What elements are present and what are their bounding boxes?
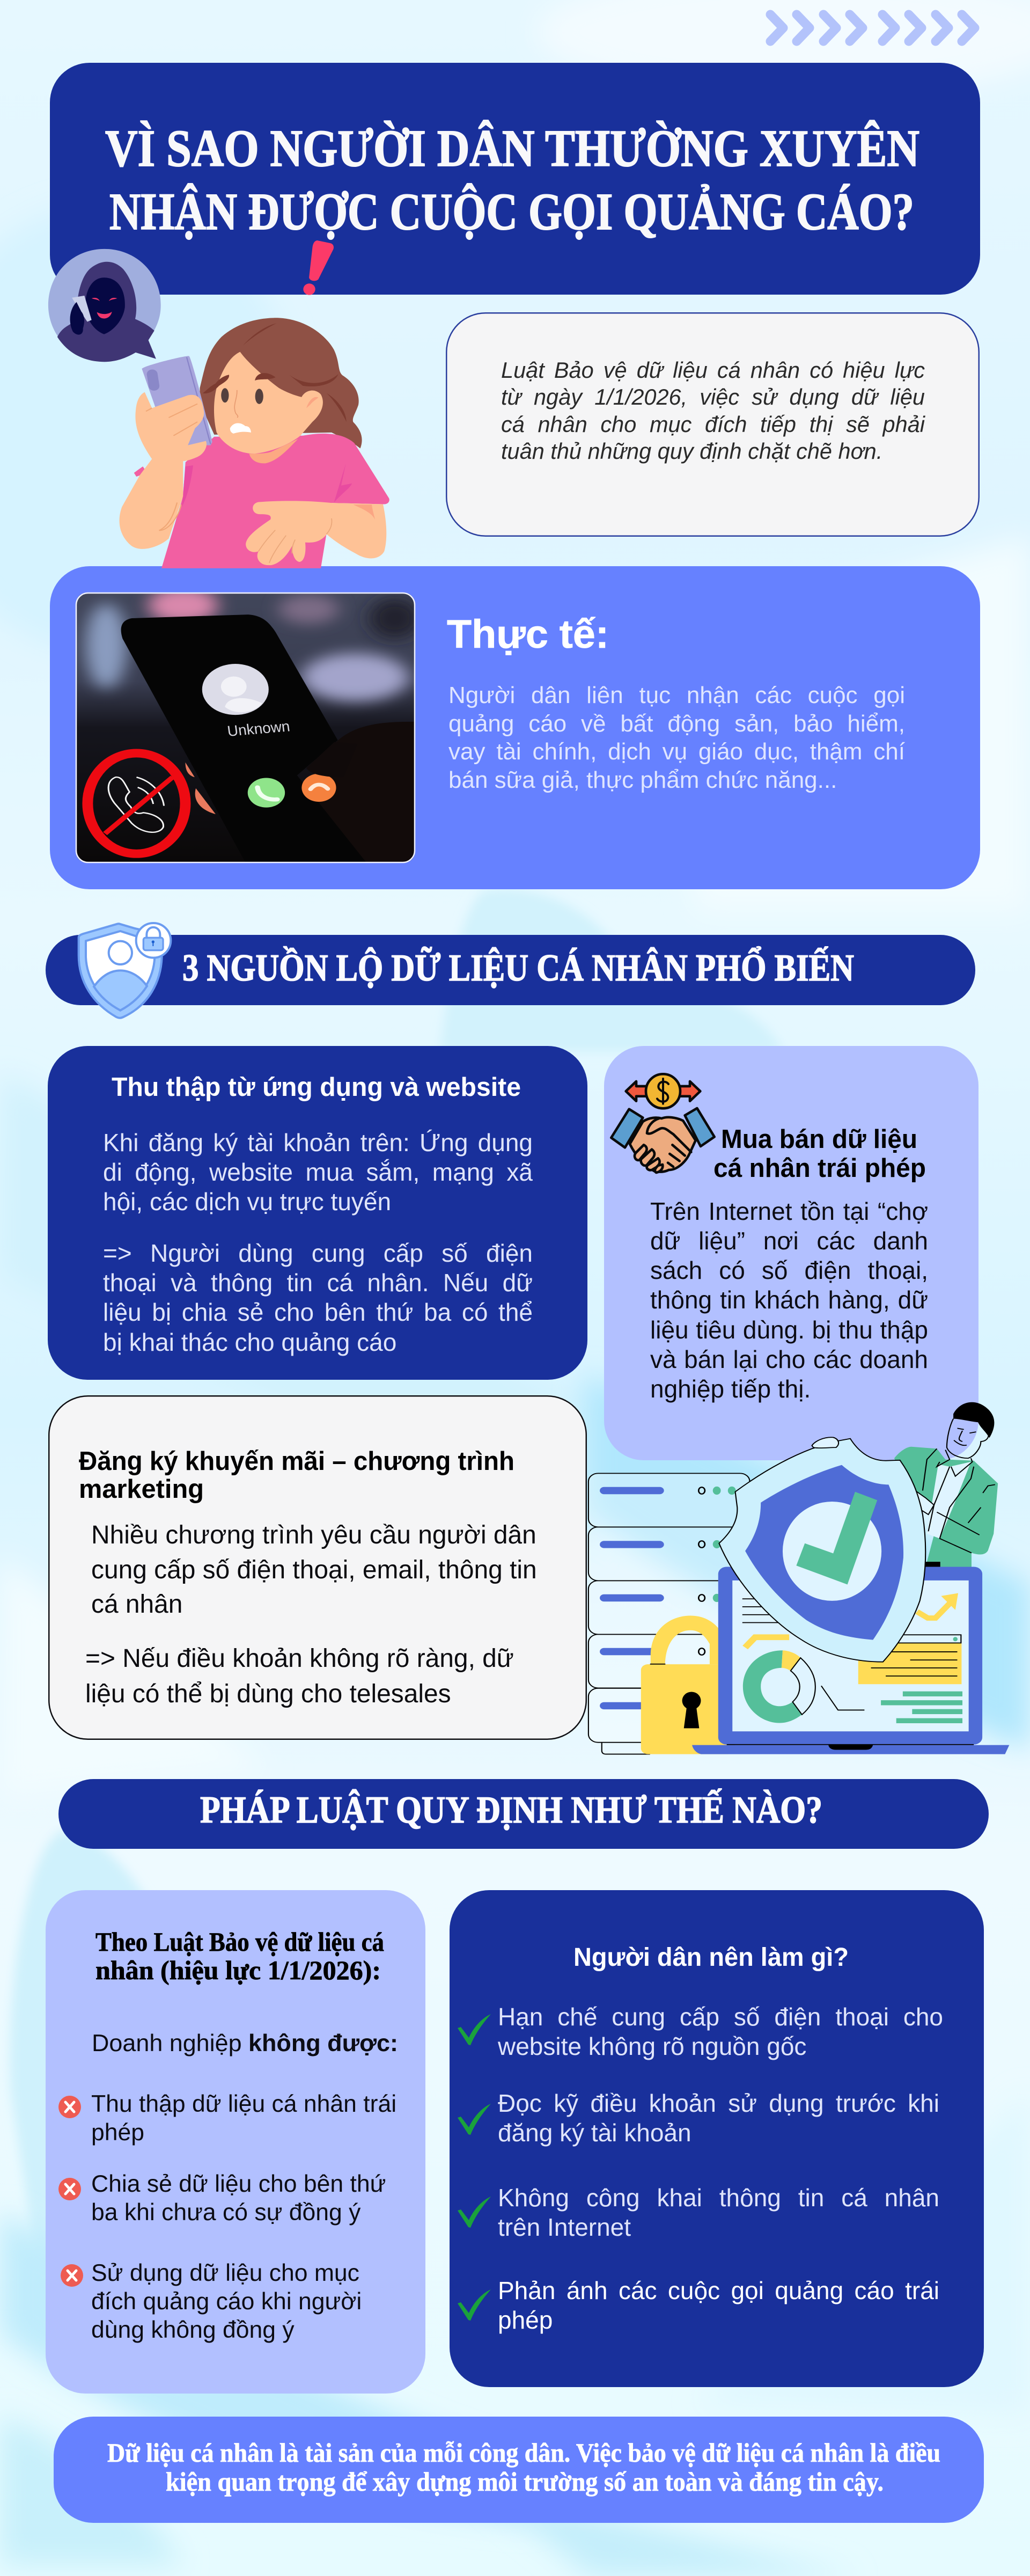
padlock (641, 1616, 734, 1754)
panel text: liệu tiêu dùng. bị thu thập (650, 1316, 928, 1344)
illustration: data security with shield, servers, lock, laptop and businessman (585, 1390, 1030, 1766)
paragraph 1: cá nhân (91, 1590, 182, 1619)
panel heading: Người dân nên làm gì? (573, 1943, 849, 1972)
intro text: cá nhân cho mục đích tiếp thị sẽ phải (501, 412, 925, 437)
advice 4: Phản ánh các cuộc gọi quảng cáo trái (498, 2277, 939, 2304)
paragraph 2: => Người dùng cung cấp số điện (103, 1239, 533, 1267)
panel heading line 2: nhân (hiệu lực 1/1/2026): (95, 1955, 381, 1985)
businessman (894, 1402, 998, 1567)
paragraph 2: thoại và thông tin cá nhân. Nếu dữ (103, 1269, 533, 1297)
advice 2 (498, 2089, 939, 2148)
advice 4: phép (498, 2306, 553, 2334)
photo: phone with unknown caller (75, 592, 415, 863)
advice 3: Không công khai thông tin cá nhân (498, 2184, 939, 2212)
paragraph 1: Nhiều chương trình yêu cầu người dân (91, 1521, 536, 1549)
exclamation mark (303, 240, 334, 295)
prohibited item 3 (91, 2259, 362, 2344)
icon: cross 3 (60, 2264, 83, 2287)
panel: collected from apps and websites (48, 1046, 587, 1380)
paragraph 2 (103, 1239, 533, 1357)
section header text: PHÁP LUẬT QUY ĐỊNH NHƯ THẾ NÀO? (200, 1788, 822, 1831)
section header: 3 sources (45, 935, 975, 1005)
paragraph 2: => Nếu điều khoản không rõ ràng, dữ (85, 1644, 514, 1673)
footer panel (54, 2417, 984, 2523)
footer line 2: kiện quan trọng để xây dựng môi trường số an toàn và đáng tin cậy. (166, 2467, 884, 2497)
reality text: Người dân liên tục nhận các cuộc gọi (448, 682, 905, 708)
reality text: vay tài chính, dịch vụ giáo dục, thậm chí (448, 738, 905, 765)
prohibited item 2: Chia sẻ dữ liệu cho bên thứ (91, 2171, 386, 2197)
panel text: dữ liệu” nơi các danh (650, 1227, 928, 1255)
paragraph 2: liệu bị chia sẻ cho bên thứ ba có thể (103, 1298, 533, 1326)
unknown label: Unknown (226, 718, 291, 740)
prohibited item 3: dùng không đồng ý (91, 2317, 295, 2343)
illustration: hacker and worried woman on phone (48, 240, 389, 568)
section header text: 3 NGUỒN LỘ DỮ LIỆU CÁ NHÂN PHỔ BIẾN (182, 946, 854, 989)
panel heading line 2: cá nhân trái phép (713, 1154, 926, 1183)
icon: handshake with dollar coin (590, 1046, 751, 1197)
advice 1 (498, 2002, 943, 2061)
panel: promotions and marketing signups (48, 1395, 587, 1740)
panel: what citizens should do (450, 1890, 984, 2387)
icon: check 2 (458, 2104, 491, 2135)
advice 4 (498, 2276, 939, 2335)
panel heading line 1: Đăng ký khuyến mãi – chương trình (79, 1447, 514, 1476)
icon: check 1 (458, 2014, 491, 2045)
paragraph 1: cung cấp số điện thoại, email, thông tin (91, 1555, 537, 1584)
paragraph 2 (85, 1641, 514, 1712)
panel heading line 1: Theo Luật Bảo vệ dữ liệu cá (95, 1927, 384, 1957)
intro panel (446, 312, 980, 537)
answer button (248, 778, 285, 808)
panel text: và bán lại cho các doanh (650, 1345, 928, 1373)
prohibited item 2: ba khi chưa có sự đồng ý (91, 2199, 360, 2226)
advice 3: trên Internet (498, 2213, 631, 2241)
advice 1: Hạn chế cung cấp số điện thoại cho (498, 2003, 943, 2031)
title line 1: VÌ SAO NGƯỜI DÂN THƯỜNG XUYÊN (105, 120, 919, 178)
advice 2: đăng ký tài khoản (498, 2119, 691, 2147)
advice 2: Đọc kỹ điều khoản sử dụng trước khi (498, 2089, 939, 2117)
section header: what the law says (58, 1779, 989, 1849)
servers (588, 1473, 750, 1754)
reality text: bán sữa giả, thực phẩm chức năng... (448, 767, 837, 793)
woman (120, 318, 389, 568)
panel heading line 2: marketing (79, 1475, 204, 1504)
prohibited item 1 (91, 2090, 396, 2147)
panel: personal data protection law (45, 1890, 425, 2394)
paragraph 2: bị khai thác cho quảng cáo (103, 1328, 396, 1356)
panel text: Trên Internet tồn tại “chợ (650, 1197, 928, 1225)
no-call sign (87, 753, 186, 854)
prohibited item 1: phép (91, 2119, 144, 2146)
paragraph 1: Khi đăng ký tài khoản trên: Ứng dụng (103, 1129, 533, 1157)
paragraph 1: hội, các dịch vụ trực tuyến (103, 1188, 391, 1216)
laptop (692, 1567, 1009, 1754)
security shield (719, 1437, 925, 1662)
icon: chevron arrows (766, 10, 980, 46)
decline button (301, 774, 336, 802)
panel text (650, 1197, 928, 1404)
icon: shield with user and lock (77, 922, 172, 1019)
footer line 1: Dữ liệu cá nhân là tài sản của mỗi công dân. Việc bảo vệ dữ liệu cá nhân là điều (107, 2438, 940, 2468)
panel text: thông tin khách hàng, dữ (650, 1286, 928, 1314)
paragraph 1 (103, 1128, 533, 1217)
intro text (501, 357, 925, 464)
paragraph 1: di động, website mua sắm, mạng xã (103, 1158, 533, 1186)
paragraph 1 (91, 1518, 537, 1622)
businesses may not: Doanh nghiệp không được: (92, 2029, 398, 2057)
reality text: quảng cáo về bất động sản, bảo hiểm, (448, 711, 905, 737)
panel: illegal data trading (604, 1046, 979, 1460)
icon: check 4 (458, 2289, 491, 2321)
intro text: từ ngày 1/1/2026, việc sử dụng dữ liệu (501, 384, 925, 409)
phone body (121, 614, 367, 863)
icon: check 3 (458, 2197, 491, 2228)
title panel (50, 63, 980, 295)
prohibited item 3: Sử dụng dữ liệu cho mục (91, 2260, 359, 2286)
icon: cross 2 (58, 2178, 81, 2200)
reality text (448, 682, 905, 793)
panel text: nghiệp tiếp thị. (650, 1375, 811, 1403)
panel heading: Thu thập từ ứng dụng và website (112, 1073, 521, 1102)
hacker speech bubble (48, 249, 161, 362)
panel text: sách có số điện thoại, (650, 1256, 928, 1284)
advice 3 (498, 2183, 939, 2242)
intro text: tuân thủ những quy định chặt chẽ hơn. (501, 438, 882, 464)
reality panel (50, 566, 980, 889)
prohibited item 3: đích quảng cáo khi người (91, 2288, 362, 2315)
panel heading line 1: Mua bán dữ liệu (721, 1125, 917, 1154)
paragraph 2: liệu có thể bị dùng cho telesales (85, 1680, 451, 1708)
prohibited item 2 (91, 2170, 386, 2227)
intro text: Luật Bảo vệ dữ liệu cá nhân có hiệu lực (501, 357, 925, 383)
icon: cross 1 (58, 2096, 81, 2118)
avatar (202, 664, 269, 715)
advice 1: website không rõ nguồn gốc (498, 2032, 806, 2060)
reality heading: Thực tế: (447, 612, 609, 656)
prohibited item 1: Thu thập dữ liệu cá nhân trái (91, 2091, 396, 2117)
